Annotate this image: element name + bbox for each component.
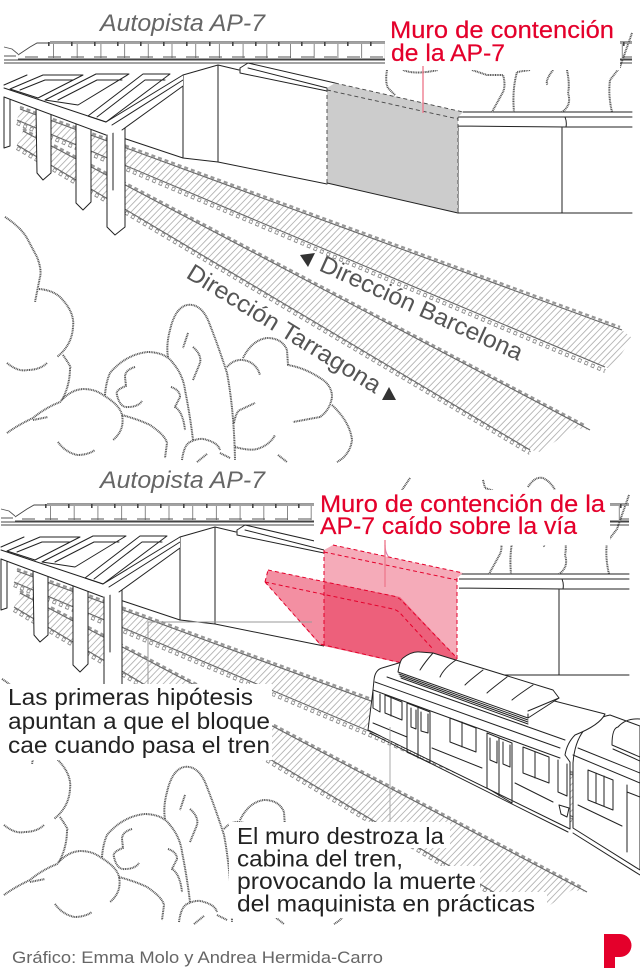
icon: P logo [604,934,632,968]
leader line: wall callout [422,66,424,113]
callout: Muro caído: Muro de contención de la [320,491,605,518]
train [368,652,640,875]
leader line: first hypothesis [148,622,312,686]
label: Dirección Barcelona: Dirección Barcelona [316,251,528,367]
callout: Muro de contención de la AP-7: Muro de contención [390,17,614,44]
leader line: driver cabin [389,727,391,827]
text: muro destroza la cabina: cabina del tren, [237,846,403,872]
label: Dirección Tarragona: Dirección Tarragona [182,259,387,399]
text: primeras hipótesis: cae cuando pasa el tren [8,732,270,758]
icon: arrow Barcelona [300,253,315,267]
cover of upper wall caps [324,544,459,664]
scene 2: collapsed wall drawing [1,478,629,924]
text: muro destroza la cabina: provocando la muerte [237,868,476,894]
text: primeras hipótesis: apuntan a que el bloque [8,708,270,734]
first carriage [368,652,605,832]
white background: hypothesis text [0,684,272,760]
gray retaining wall panel [327,83,463,213]
panel: original wall position in pink [324,545,463,675]
white label background [314,490,610,545]
white label background [385,0,620,70]
text: muro destroza la cabina: El muro destroza la [237,823,445,849]
callout: Muro caído: AP-7 caído sobre la vía [320,513,577,540]
credit: Gráfico: Emma Molo y Andrea Hermida-Carro [12,948,383,967]
icon: arrow Tarragona [382,387,396,400]
text: primeras hipótesis [8,684,270,758]
text: muro destroza la cabina: del maquinista en prácticas [237,890,535,916]
callout: Muro de contención de la AP-7 [390,17,614,67]
white background: cabin text [229,822,547,918]
callout: Muro caído [320,491,605,540]
panel: fallen wall block [265,570,457,676]
second carriage [573,715,640,875]
heading: Autopista AP-7 (bottom): Autopista AP-7 [98,467,267,494]
heading: Autopista AP-7 (top): Autopista AP-7 [98,10,267,37]
text: primeras hipótesis: Las primeras hipótesis [8,684,253,710]
callout: Muro de contención de la AP-7: de la AP-7 [391,40,505,67]
leader line: fallen wall callout [384,540,386,587]
text: muro destroza la cabina [237,823,535,916]
scene 1: intact retaining wall drawing [4,0,632,462]
